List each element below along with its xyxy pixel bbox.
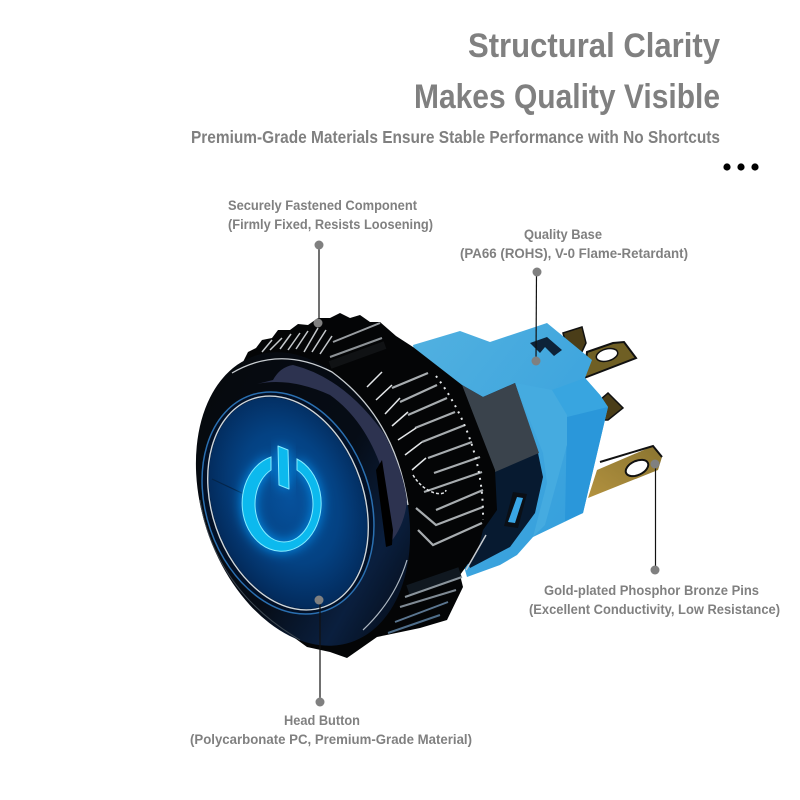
callout: securely fastened component [228,198,433,328]
front bezel [159,324,447,674]
callout: head button: Head Button [284,713,360,728]
title [414,27,720,116]
callout: securely fastened component: (Firmly Fixed, Resists Loosening) [228,217,433,232]
title: Makes Quality Visible [414,78,720,116]
callout: gold-plated pins: (Excellent Conductivity, Low Resistance) [529,602,780,617]
knurl fins, upper [262,323,385,365]
callout: head button [190,596,472,747]
callout: quality base: Quality Base [524,227,602,242]
subtitle: Premium-Grade Materials Ensure Stable Performance with No Shortcuts [191,127,720,147]
knurl fins, lower [388,535,486,633]
title: Structural Clarity [468,27,720,65]
bezel rim highlights [232,359,408,505]
knurled body [215,313,497,658]
dark body band [430,383,543,568]
callout: gold-plated pins [529,460,780,617]
button face [173,369,403,637]
bezel highlight crescent [257,365,407,543]
gold pins [563,327,662,498]
callout: quality base: (PA66 (ROHS), V-0 Flame-Retardant) [460,246,688,261]
callout: gold-plated pins: Gold-plated Phosphor Bronze Pins [544,583,759,598]
knurl fins, side [392,373,483,545]
icon: glowing power symbol [242,446,321,551]
callout: securely fastened component: Securely Fastened Component [228,198,417,213]
product illustration: push button switch [159,313,662,674]
icon: three dots [723,163,759,171]
callout: quality base [460,227,688,366]
blue base [413,323,608,577]
rectangular slot on base [530,337,562,356]
callout: head button: (Polycarbonate PC, Premium-Grade Material) [190,732,472,747]
knurl fin white ticks [367,372,483,520]
